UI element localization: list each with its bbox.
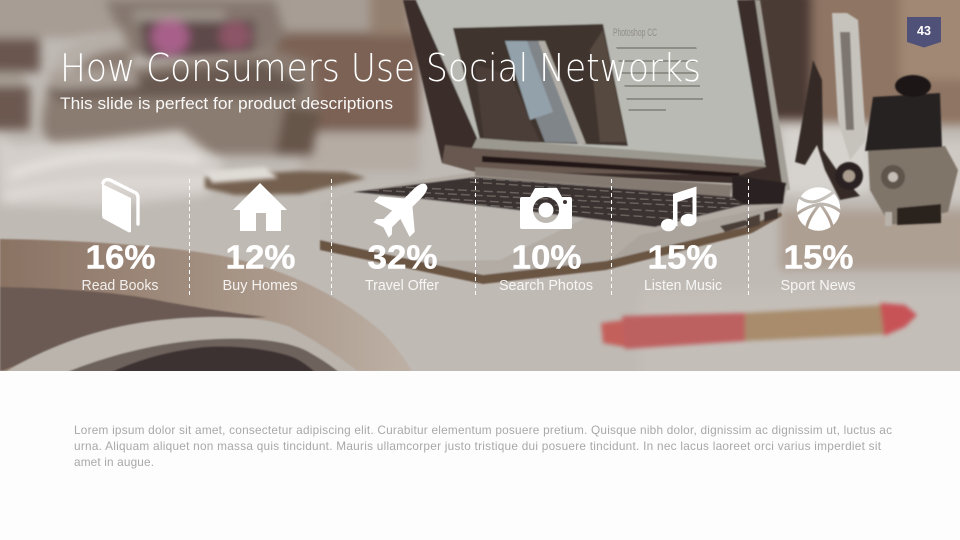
slide number badge: 43 — [917, 24, 931, 38]
photoshop screen text: Photoshop CC — [613, 27, 657, 39]
photoshop screen text — [613, 27, 703, 111]
value: 15%: 15% — [784, 238, 854, 276]
stat: search photos — [499, 188, 593, 294]
body paragraph — [74, 423, 892, 469]
stat: sport news — [780, 187, 856, 294]
icon: book — [102, 180, 138, 232]
background photo: desk with laptop — [0, 0, 960, 380]
label: search photos: Search Photos — [499, 277, 593, 294]
value: 16%: 16% — [86, 238, 156, 276]
icon: music note — [661, 186, 696, 231]
headphone arc — [0, 317, 362, 375]
icon: ball — [797, 187, 840, 231]
icon: camera — [520, 188, 572, 229]
phone on desk — [205, 171, 366, 195]
stat: buy homes — [222, 183, 298, 294]
white cables — [0, 130, 225, 207]
stat: listen music — [644, 186, 722, 294]
dashed column dividers — [190, 179, 748, 295]
value: 32%: 32% — [368, 238, 438, 276]
laptop base — [320, 167, 788, 284]
keyboard keys — [360, 178, 745, 220]
title: How Consumers Use Social Networks — [60, 46, 701, 90]
value: 12%: 12% — [226, 238, 296, 276]
slide number badge — [907, 17, 941, 48]
wall and desk background — [0, 0, 960, 274]
body paragraph: amet in augue. — [74, 455, 154, 469]
wooden chair arm — [0, 239, 412, 371]
red crayon — [601, 303, 917, 349]
helmet and goggles — [105, 0, 285, 58]
label: travel offer: Travel Offer — [365, 277, 439, 294]
icon: airplane — [363, 167, 444, 248]
action camera — [795, 13, 958, 226]
icon: house — [233, 183, 287, 231]
body paragraph: Lorem ipsum dolor sit amet, consectetur adipiscing elit. Curabitur elementum posuere pretium. Quisque nibh dolor, dignissim ac dignissim ut, luctus ac — [74, 423, 892, 437]
label: buy homes: Buy Homes — [222, 277, 298, 294]
stat: travel offer — [363, 167, 444, 294]
value: 10%: 10% — [512, 238, 582, 276]
label: listen music: Listen Music — [644, 277, 722, 294]
label: sport news: Sport News — [780, 277, 856, 294]
body paragraph: urna. Aliquam aliquet non massa quis tincidunt. Mauris ullamcorper justo tristique dui posuere tincidunt. In nec lacus laoreet orci varius imperdiet sit — [74, 439, 882, 453]
subtitle: This slide is perfect for product descriptions — [60, 94, 393, 113]
stat: read books — [82, 180, 158, 294]
value: 15%: 15% — [648, 238, 718, 276]
laptop lid — [403, 0, 790, 190]
label: read books: Read Books — [82, 277, 158, 294]
bag and headphones — [42, 28, 320, 155]
